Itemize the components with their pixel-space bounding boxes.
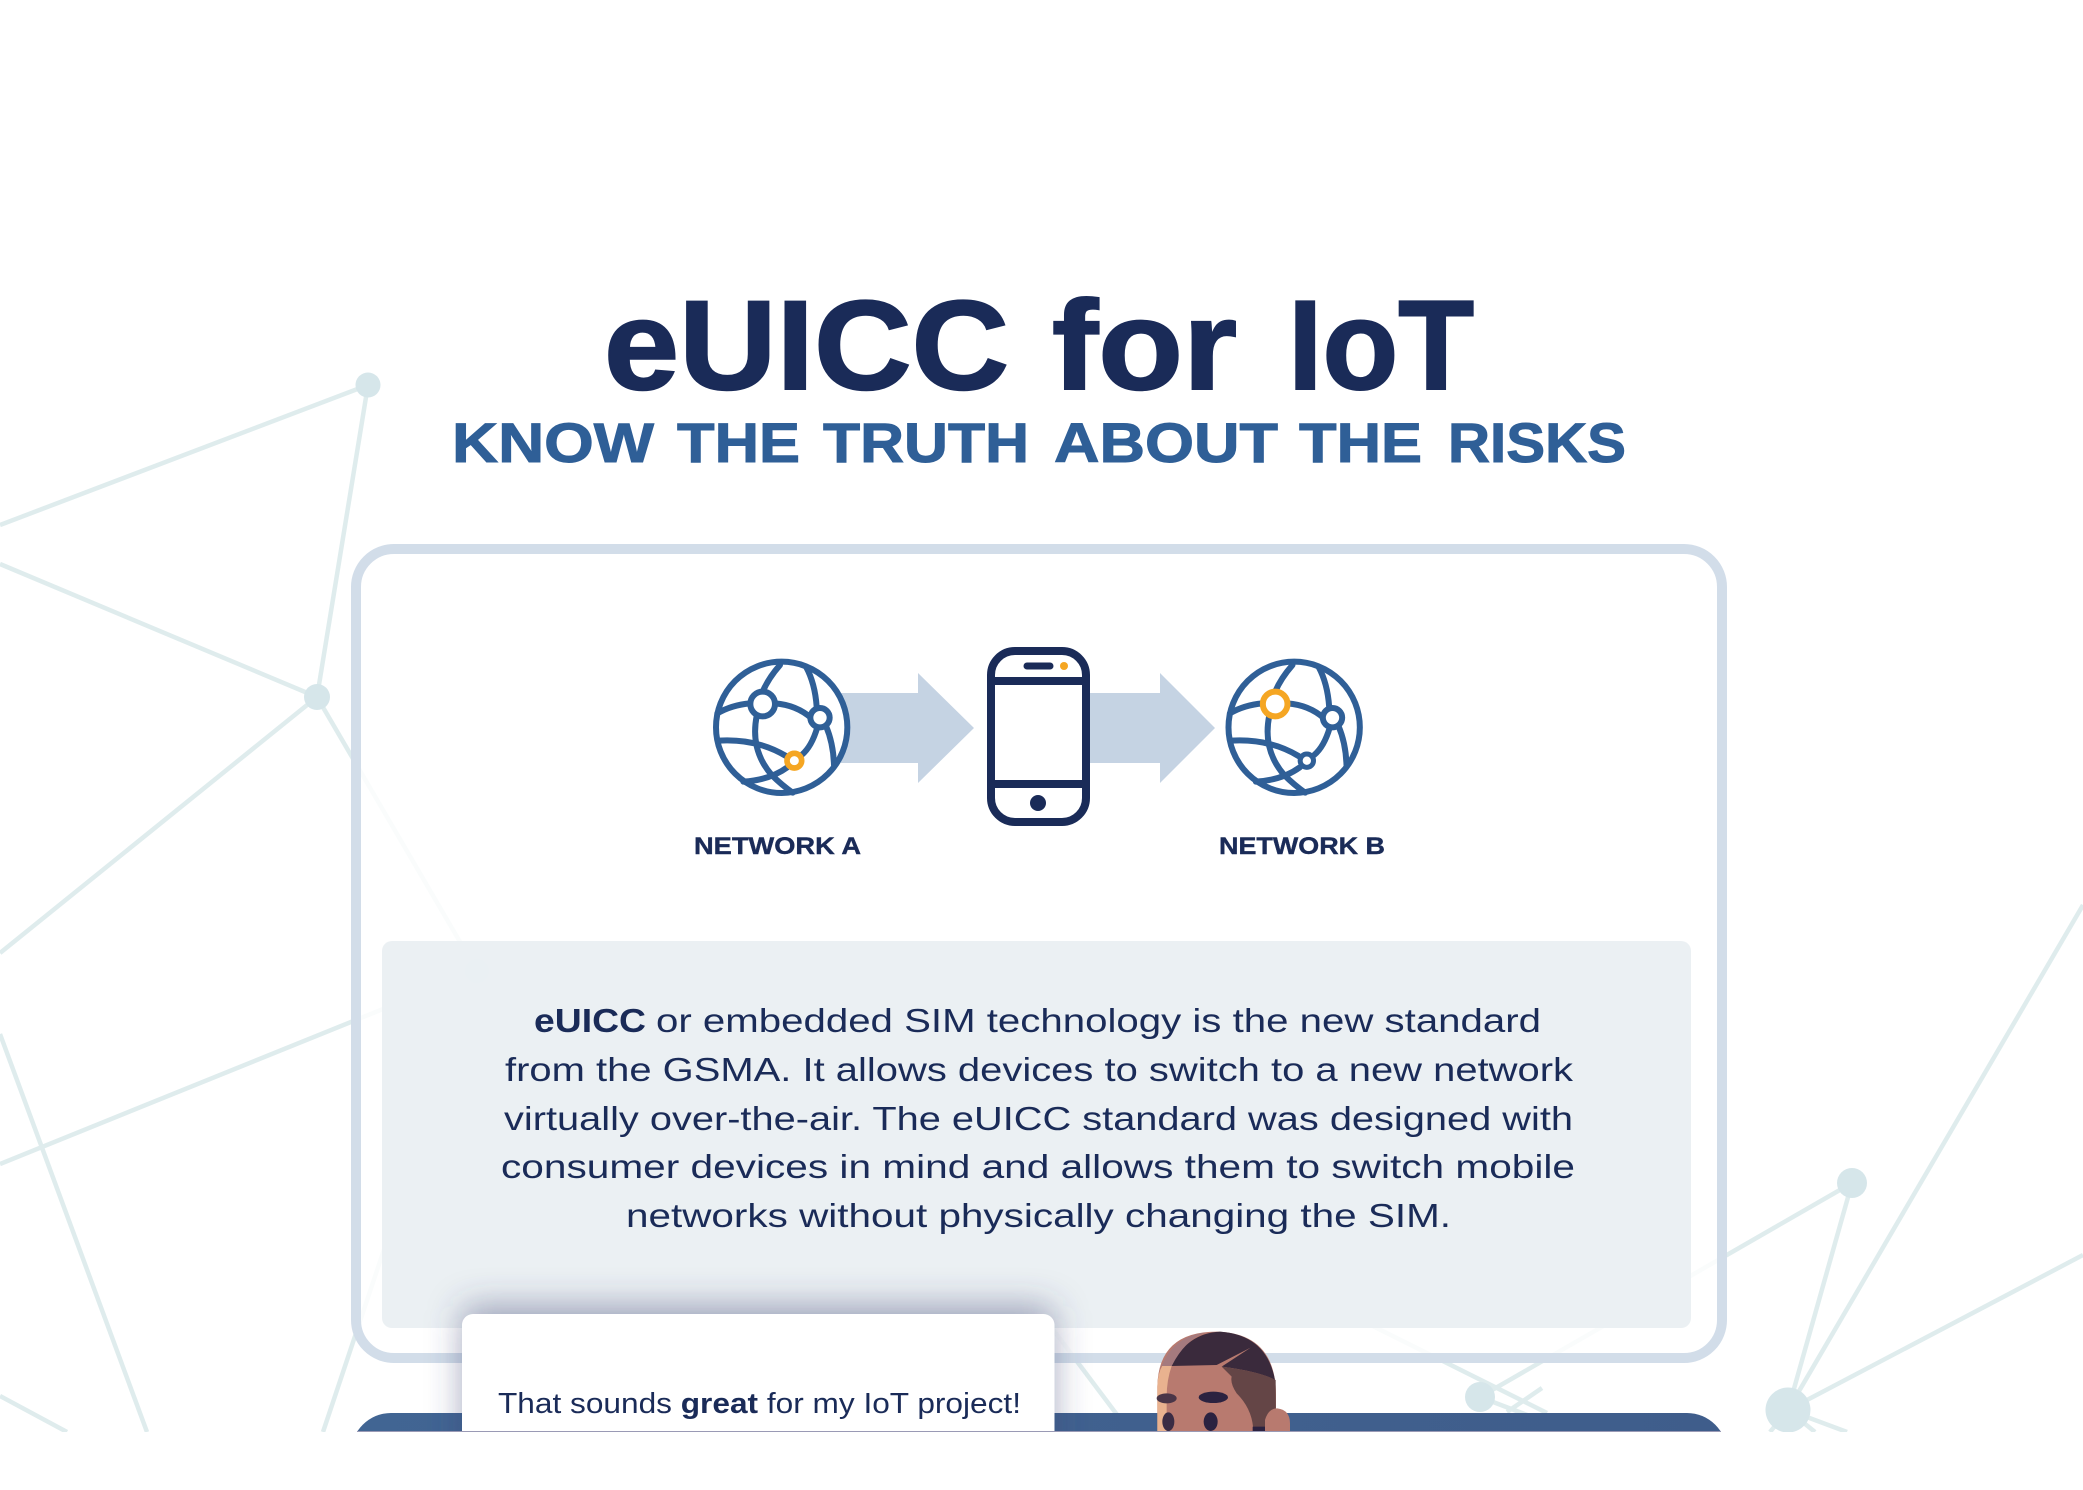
description text	[501, 1002, 1575, 1234]
title: eUICC	[604, 274, 1009, 416]
icon: phone	[991, 651, 1086, 822]
subtitle: ABOUT	[1054, 411, 1278, 474]
title: for	[1052, 274, 1237, 416]
panel: outer frame	[356, 549, 1722, 1358]
arrow: phone to network B	[1090, 673, 1215, 783]
subtitle: TRUTH	[823, 411, 1029, 474]
description text: networks without physically changing the SIM.	[626, 1197, 1451, 1234]
label: network A: NETWORK A	[694, 833, 861, 860]
icon: globe network B	[1228, 662, 1360, 793]
title: IoT	[1288, 274, 1474, 416]
label: network B: NETWORK B	[1219, 833, 1385, 860]
subtitle: THE	[677, 411, 800, 474]
character head	[1157, 1332, 1290, 1433]
description text: virtually over-the-air. The eUICC standard was designed with	[504, 1100, 1573, 1137]
bottom blue bar	[358, 1413, 1720, 1431]
background network pattern	[0, 372, 2083, 1432]
icon: globe network A	[716, 662, 847, 793]
description text: eUICC	[534, 1002, 646, 1039]
card text: That sounds great for my IoT project!	[498, 1388, 1021, 1420]
subtitle: RISKS	[1448, 411, 1626, 474]
description text: from the GSMA. It allows devices to switch to a new network	[505, 1051, 1574, 1088]
subtitle: THE	[1299, 411, 1422, 474]
panel: description background	[382, 941, 1691, 1328]
white veil inside frame	[361, 768, 1717, 1353]
subtitle: KNOW	[452, 411, 654, 474]
subtitle	[452, 411, 1626, 474]
speech card	[462, 1314, 1054, 1431]
description text: consumer devices in mind and allows them to switch mobile	[501, 1148, 1575, 1185]
bottom edge line	[357, 1431, 1721, 1432]
description text: or embedded SIM technology is the new standard	[656, 1002, 1541, 1039]
card shadow	[438, 1283, 1078, 1413]
title	[604, 274, 1474, 416]
arrow: network A to phone	[841, 673, 974, 783]
